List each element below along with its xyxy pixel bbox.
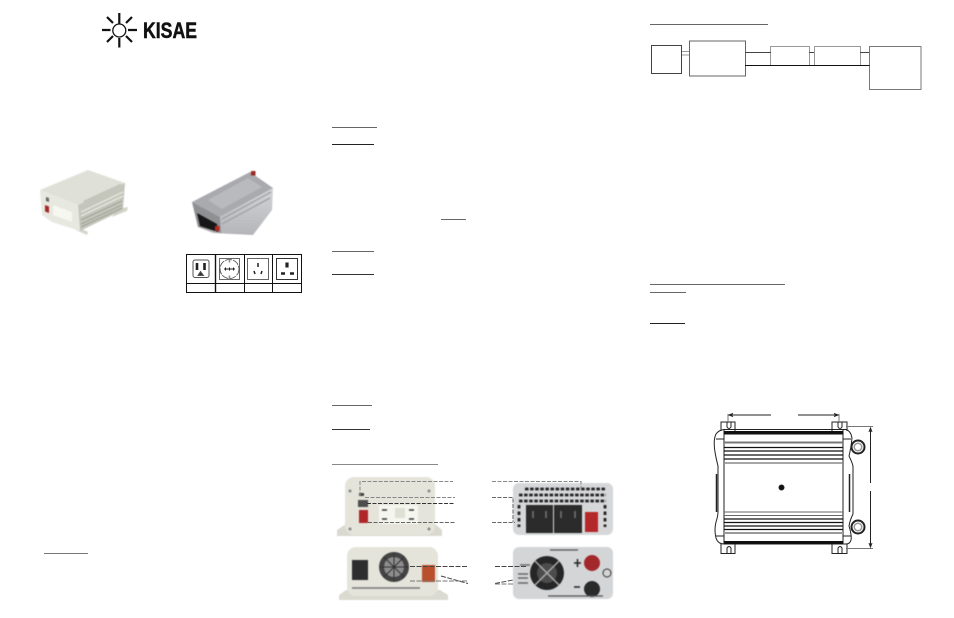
icon: US outlet: [193, 260, 209, 278]
box: source: [652, 46, 682, 74]
heading underline: left column: [44, 552, 88, 554]
heading underline: block diagram: [650, 24, 768, 26]
box: breaker two: [814, 46, 860, 66]
photo: silver inverter front panel: [513, 483, 613, 535]
photo: white inverter front panel: [337, 477, 442, 536]
icon: Schuko outlet: [220, 258, 240, 280]
mounting feet: [721, 422, 847, 554]
width dimension: [728, 414, 839, 423]
side notches: [716, 474, 850, 512]
photo: white inverter rear panel: [339, 547, 448, 600]
photo: silver inverter: [192, 171, 273, 235]
dimension drawing: inverter top view: [714, 414, 873, 554]
housing outline: [714, 430, 853, 544]
top cooling fins: [724, 431, 843, 463]
callouts: rear panel left: [410, 566, 468, 584]
bottom cooling fins: [724, 512, 843, 544]
heading underlines: middle column: [332, 128, 466, 464]
box: load: [870, 46, 921, 90]
terminals: [852, 440, 864, 534]
callouts: rear panel right: [495, 566, 527, 584]
box: breaker one: [770, 46, 810, 66]
block diagram: system wiring: [652, 41, 921, 90]
center hole: [779, 485, 784, 490]
logo: KISAE sun: [102, 13, 197, 48]
icon: AU outlet: [248, 258, 268, 280]
height dimension: [846, 426, 873, 548]
photo: white inverter: [40, 170, 128, 235]
table: outlet types: [186, 254, 302, 293]
icon: sun: [102, 13, 137, 48]
icon: UK outlet: [276, 258, 298, 280]
photo: silver inverter rear panel: [513, 547, 613, 599]
box: inverter: [690, 41, 746, 76]
wiring lines: [682, 52, 870, 66]
logo wordmark: KISAE: [143, 18, 197, 43]
heading underlines: right column: [650, 284, 785, 324]
callouts: front panel left: [360, 482, 455, 522]
inner walls: [716, 430, 851, 544]
callouts: front panel right: [492, 482, 581, 522]
